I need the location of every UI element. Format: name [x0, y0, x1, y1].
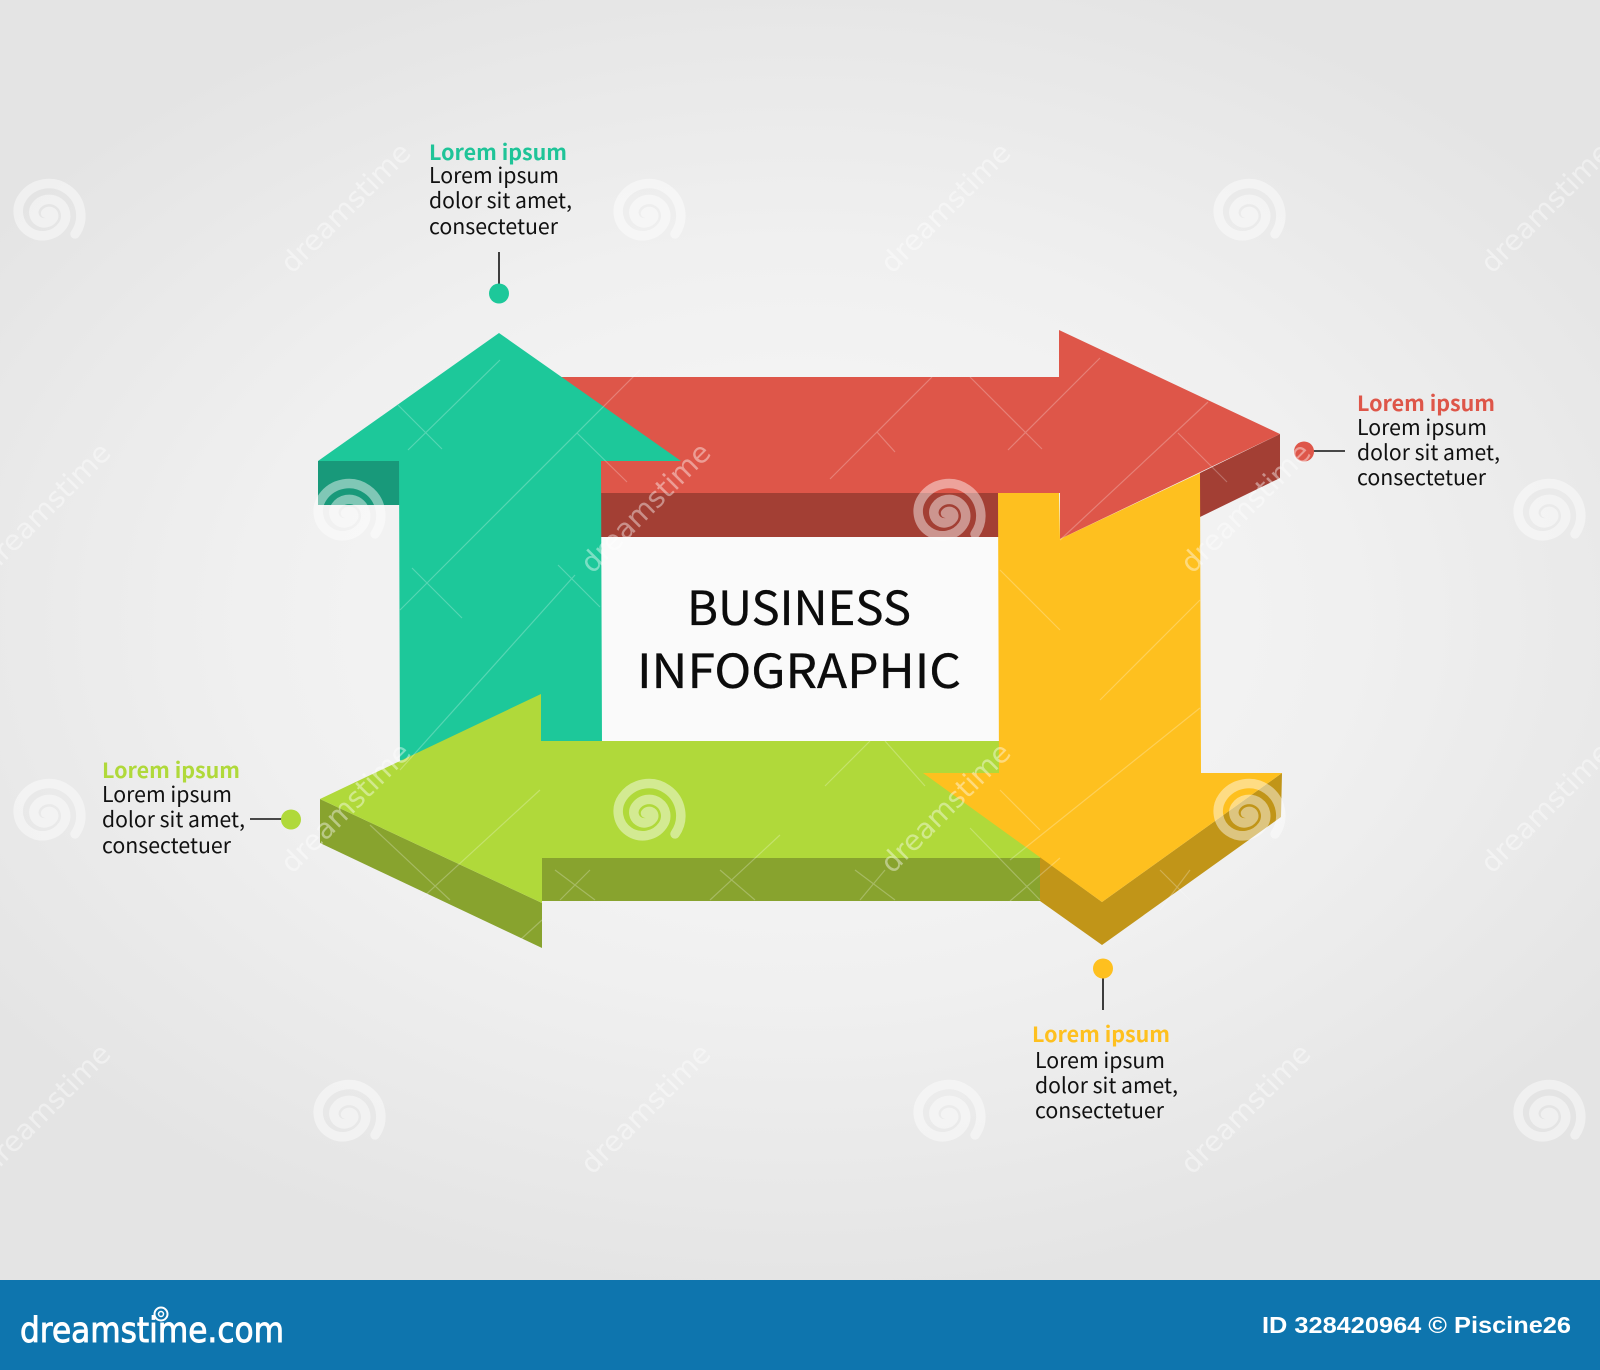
watermark text: dreamstime	[1174, 436, 1317, 579]
arrow: teal up	[318, 333, 681, 775]
footer banner	[0, 1280, 1600, 1370]
watermark text: dreamstime	[274, 136, 417, 279]
callout: lime: consectetuer	[102, 829, 232, 860]
title	[637, 570, 961, 702]
title: INFOGRAPHIC	[637, 633, 961, 702]
watermark lines	[370, 358, 1227, 940]
callout: red	[1294, 388, 1500, 492]
callout: yellow: consectetuer	[1035, 1094, 1165, 1125]
arrow: red right	[555, 330, 1280, 539]
watermark text: dreamstime	[874, 736, 1017, 879]
callout: red: Lorem ipsum	[1357, 388, 1495, 418]
callout: teal: dolor sit amet,	[429, 184, 572, 215]
watermark text: dreamstime	[874, 136, 1017, 279]
arrow: lime left	[320, 694, 1060, 948]
watermark text: dreamstime	[274, 736, 417, 879]
callout: lime: Lorem ipsum	[102, 778, 232, 809]
callout: red: consectetuer	[1357, 461, 1487, 492]
footer credit: ID 328420964 © Piscine26	[1262, 1312, 1571, 1338]
watermark text: dreamstime	[1174, 1037, 1317, 1180]
callout: yellow: dolor sit amet,	[1035, 1069, 1178, 1100]
callout: yellow: Lorem ipsum	[1032, 1019, 1170, 1049]
callout: red: dolor sit amet,	[1357, 436, 1500, 467]
callout: teal	[429, 137, 572, 304]
callout: lime	[102, 755, 301, 860]
callout: yellow	[1032, 958, 1178, 1125]
callout: lime: dolor sit amet,	[102, 803, 245, 834]
callout: red: Lorem ipsum	[1357, 411, 1487, 442]
callout: teal: Lorem ipsum	[429, 159, 559, 190]
callout: lime: Lorem ipsum	[102, 755, 240, 785]
watermark text: dreamstime	[574, 436, 717, 579]
watermark text	[0, 136, 1600, 1180]
footer logo text: dreamstime.com	[20, 1311, 284, 1351]
watermark spirals	[9, 171, 1593, 1155]
callout: teal: consectetuer	[429, 210, 559, 241]
callout: teal: Lorem ipsum	[429, 137, 567, 167]
arrow: yellow down	[923, 473, 1282, 945]
watermark text: dreamstime	[574, 1037, 717, 1180]
callout: yellow: Lorem ipsum	[1035, 1044, 1165, 1075]
title: BUSINESS	[687, 570, 911, 639]
center white panel	[601, 537, 999, 742]
